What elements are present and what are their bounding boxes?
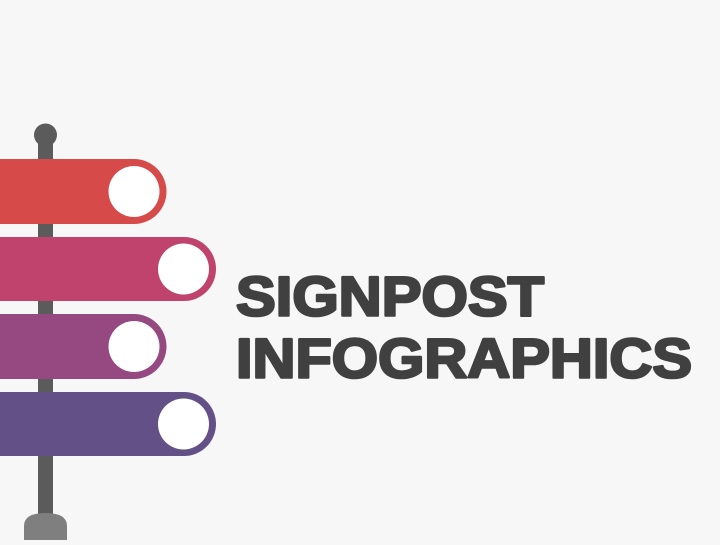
title — [236, 264, 692, 390]
title: INFOGRAPHICS — [236, 326, 692, 390]
sign 1 — [0, 159, 166, 224]
pole base — [24, 513, 67, 540]
sign 4 — [0, 392, 216, 456]
sign 3 — [0, 314, 166, 379]
pole knob — [34, 124, 57, 146]
pole — [38, 135, 53, 520]
title: SIGNPOST — [236, 264, 544, 328]
sign 2 — [0, 237, 216, 301]
signpost — [0, 124, 216, 540]
